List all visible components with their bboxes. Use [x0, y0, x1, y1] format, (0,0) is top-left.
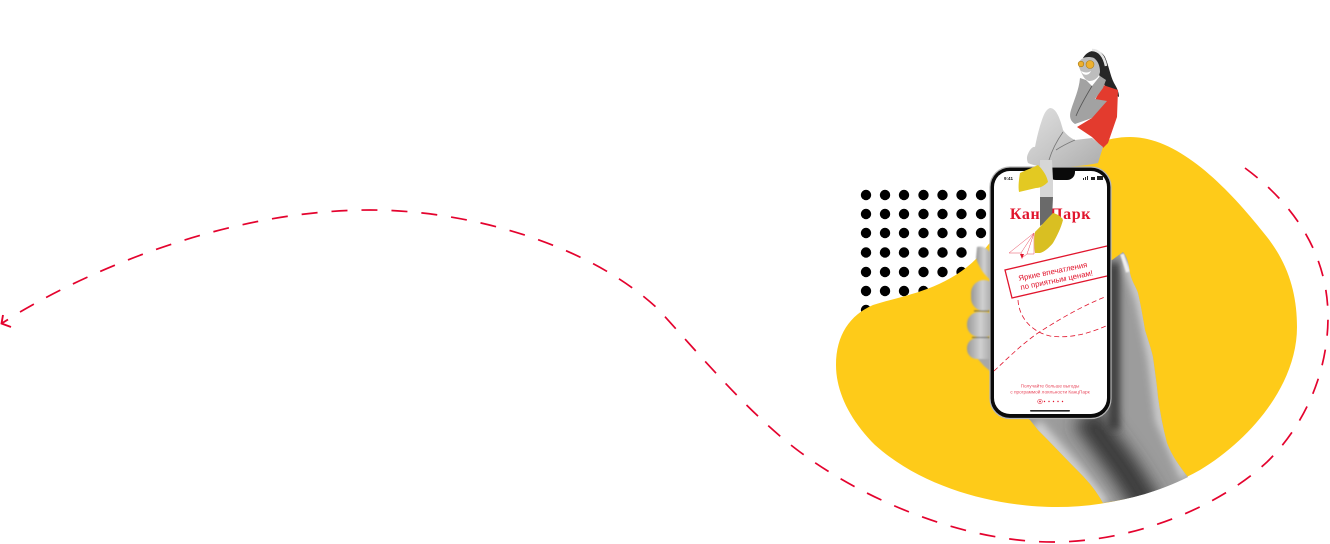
hand holding phone — [967, 240, 1200, 510]
dashed route line with arrow — [2, 168, 1328, 542]
dashed route lines on screen — [994, 297, 1106, 371]
app logo: КанцПарк — [1010, 206, 1091, 223]
phone body — [990, 167, 1111, 418]
paper plane icon — [1009, 233, 1034, 259]
loyalty caption: Получайте больше выгоды — [1021, 382, 1080, 388]
notch — [1048, 170, 1075, 180]
loyalty caption: с программой лояльности КанцПарк — [1010, 388, 1091, 394]
woman sitting on phone — [1019, 50, 1119, 253]
red shirt — [1077, 85, 1118, 148]
status bar time: 9:41 — [1004, 176, 1014, 181]
yellow shoe upper — [1019, 165, 1048, 192]
fingers — [967, 247, 997, 376]
yellow shoe lower — [1034, 213, 1063, 253]
promo slogan banner: Яркие впечатления — [1018, 260, 1088, 283]
promo slogan banner: по приятным ценам! — [1020, 268, 1094, 292]
palm and wrist — [1028, 252, 1188, 503]
yellow blob background — [836, 137, 1297, 507]
jeans — [1027, 108, 1103, 167]
dark lower shin — [1040, 197, 1053, 226]
face — [1079, 57, 1100, 81]
sunglasses — [1078, 60, 1094, 68]
smile — [1081, 71, 1091, 75]
phone screen — [994, 171, 1107, 414]
smartphone — [990, 167, 1111, 418]
pagination dots — [1038, 399, 1063, 404]
jeans fold line — [1049, 132, 1075, 160]
promo slogan banner — [1005, 246, 1107, 298]
shin and lower jeans — [1040, 160, 1053, 198]
dot grid pattern — [861, 190, 986, 315]
hair — [1083, 51, 1119, 97]
home indicator — [1030, 410, 1070, 412]
forearm shadow — [1076, 86, 1092, 116]
status icons — [1083, 176, 1103, 180]
arms and hands — [1070, 76, 1107, 124]
headband — [1092, 50, 1106, 66]
loyalty caption — [1010, 382, 1091, 394]
